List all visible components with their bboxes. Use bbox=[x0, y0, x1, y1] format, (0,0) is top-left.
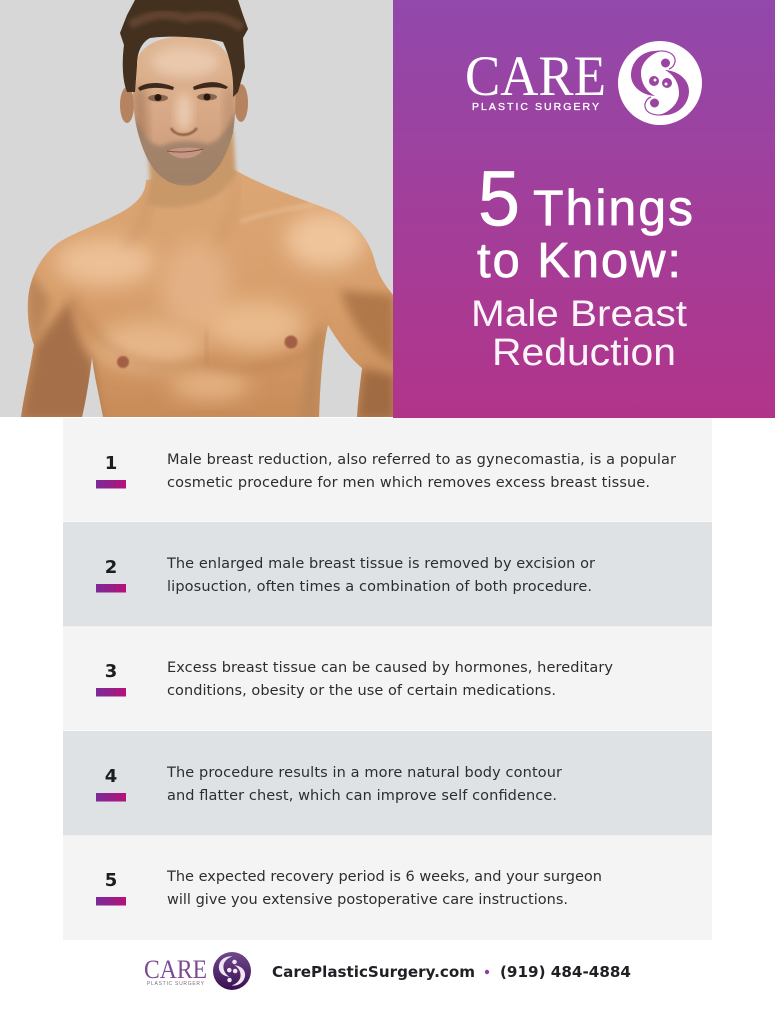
title: 5 bbox=[478, 154, 520, 242]
title: Male Breast bbox=[471, 293, 688, 334]
title: Reduction bbox=[492, 332, 676, 374]
panel: fact 1: Male breast reduction, also referred to as gynecomastia, is a popular bbox=[167, 452, 676, 468]
eyes and brows bbox=[138, 83, 174, 91]
neck bbox=[146, 130, 236, 208]
nipples bbox=[117, 356, 129, 368]
mouth bbox=[167, 148, 203, 158]
panel: fact 3: conditions, obesity or the use of certain medications. bbox=[167, 683, 556, 699]
website: CarePlasticSurgery.com bbox=[272, 963, 475, 981]
logo tagline: PLASTIC SURGERY bbox=[472, 101, 599, 113]
panel: fact 4: 4 bbox=[105, 766, 117, 787]
title bbox=[471, 154, 693, 374]
panel: fact 2: The enlarged male breast tissue is removed by excision or bbox=[166, 556, 595, 572]
panel: fact 3: 3 bbox=[105, 661, 117, 682]
logo: Care Plastic Surgery white bbox=[465, 41, 702, 125]
stubble bbox=[135, 110, 236, 186]
logo wordmark: CARE bbox=[465, 45, 606, 108]
hair bbox=[120, 0, 248, 97]
panel: fact 2: liposuction, often times a combination of both procedure. bbox=[167, 579, 592, 595]
phone number: (919) 484-4884 bbox=[500, 963, 631, 981]
panel: fact 5: will give you extensive postoperative care instructions. bbox=[167, 892, 568, 908]
panel: fact 4: and flatter chest, which can improve self confidence. bbox=[167, 788, 557, 804]
panel: fact 1: 1 bbox=[105, 453, 117, 474]
bullet dot bbox=[485, 970, 489, 974]
footer logo: PLASTIC SURGERY bbox=[147, 981, 205, 987]
title: to Know: bbox=[477, 234, 681, 288]
logo emblem bbox=[618, 41, 702, 125]
footer bbox=[144, 952, 631, 990]
title: Things bbox=[533, 180, 693, 236]
panel: fact 3: Excess breast tissue can be caused by hormones, hereditary bbox=[167, 660, 613, 676]
panel: purple header bbox=[393, 0, 775, 418]
footer logo: CARE bbox=[144, 955, 207, 984]
panel: fact 5 bbox=[63, 836, 712, 940]
panel: fact 5: The expected recovery period is 6 weeks, and your surgeon bbox=[166, 869, 602, 885]
panel: fact 1: cosmetic procedure for men which removes excess breast tissue. bbox=[167, 475, 650, 491]
panel: fact 4 bbox=[63, 731, 712, 836]
panel: fact 5: 5 bbox=[105, 870, 117, 891]
ears bbox=[120, 87, 134, 123]
panel: fact 2 bbox=[63, 522, 712, 626]
nose bbox=[171, 128, 197, 135]
panel: fact 2: 2 bbox=[105, 557, 117, 578]
photo: shirtless male model bbox=[0, 0, 395, 420]
panel: fact 3 bbox=[63, 627, 712, 730]
panel: fact 4: The procedure results in a more natural body contour bbox=[166, 765, 562, 781]
body torso and arms bbox=[21, 170, 393, 417]
footer logo bbox=[144, 952, 251, 990]
panel: fact 1 bbox=[63, 418, 712, 522]
face bbox=[133, 36, 236, 186]
